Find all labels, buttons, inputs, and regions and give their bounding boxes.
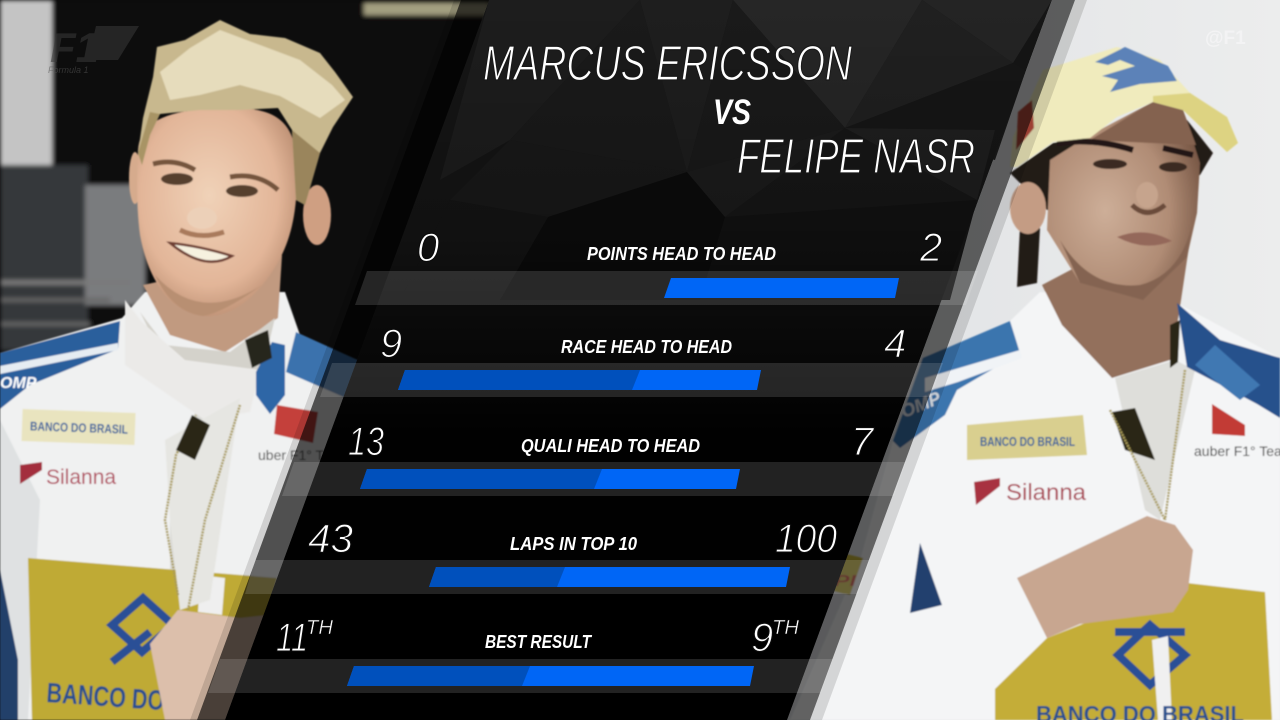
cap brim [1153,93,1238,152]
bar [664,278,899,298]
bar: Ericsson share [347,666,530,686]
lower fade to black [225,0,1052,720]
nose [180,230,224,236]
value: Nasr: 9 [751,616,773,660]
watermark: F1 logo: F1 [50,24,99,71]
value: Ericsson: 0 [417,226,439,270]
left shoulder blue [893,321,1020,448]
value: Ericsson: 13 [348,420,384,464]
forehead shade [1090,102,1196,145]
track [355,271,978,305]
value: Nasr: 2 [919,226,942,270]
face [1047,102,1200,300]
cap side logo [1016,100,1034,150]
eyes [161,173,193,185]
bar: Ericsson share [360,469,602,489]
jaw stubble [1060,225,1192,300]
stat row: laps in top 10 [245,517,870,594]
title: driver names [483,37,975,184]
stat row: best result [208,616,833,693]
sponsor badge [22,409,136,445]
name: Marcus Ericsson: MARCUS ERICSSON [483,37,852,91]
OMP text: OMP [898,387,944,422]
ear [1010,182,1046,234]
value: Ericsson: 11 [276,616,308,660]
sponsor badge: BANCO DO BRASIL [30,419,129,437]
track [245,560,870,594]
value: Ericsson: 43 [308,517,353,561]
driver photo: Felipe Nasr [790,47,1280,720]
label: BEST RESULT [485,632,593,652]
neck [143,255,282,352]
brows [1057,142,1133,150]
track [320,363,943,397]
white placket over panel [198,575,225,615]
bar: Nasr share [360,469,740,489]
hair below ear [1017,227,1040,287]
Sauber logo [1212,404,1245,436]
Banco do Brasil logo [1115,625,1185,685]
right photo backdrop [775,0,1280,720]
track [282,462,906,496]
stat row: points head to head [355,226,978,305]
cap logo [1095,47,1177,92]
left shoulder blue [0,321,120,409]
OMP shoulder text: OMP [0,375,37,392]
race suit [790,292,1280,720]
yellow chest panel [995,583,1272,720]
suit collar [125,300,260,420]
label: QUALI HEAD TO HEAD [521,436,700,456]
driver photo: Marcus Ericsson [0,20,362,720]
panel: central dark slanted panel [225,0,1052,720]
panel: dark translucent slanted band left [197,0,489,720]
mouth [1117,232,1172,246]
dark side strip [0,570,18,720]
bar: Nasr share [429,567,790,587]
nose [1132,205,1165,212]
bar: Ericsson share [429,567,565,587]
Silanna patch [974,478,1086,505]
panel: light outer slanted strip left [190,0,489,720]
sponsor badge [967,415,1087,460]
panel: dark translucent slanted band right [787,0,1075,720]
Pirelli patch: PI [834,573,857,590]
neck [1042,240,1190,378]
stat row: race head to head [320,322,943,397]
watermark: F1 logo: Formula 1 [48,65,89,75]
face [137,108,297,316]
watermark: @F1: @F1 [1205,28,1246,49]
value: Nasr: 4 [884,322,906,366]
hand [1017,516,1193,638]
zip opening [165,398,240,610]
label: LAPS IN TOP 10 [510,534,637,554]
chin stubble [155,275,262,316]
ears [303,185,331,245]
smile [170,243,232,262]
undershirt and neck [140,312,275,395]
race suit [0,292,362,720]
panel: light outer slanted strip right [810,0,1087,720]
value: Nasr: 100 [775,517,837,561]
label: RACE HEAD TO HEAD [561,337,732,357]
eyes [1093,159,1127,169]
vs label: VS [713,93,751,132]
value: Nasr: TH [772,617,800,639]
watermark: F1 logo [48,24,139,75]
value: Ericsson: TH [306,617,334,639]
Pirelli patch [830,553,863,595]
Silanna patch: Silanna [1006,479,1086,505]
hair [138,20,353,205]
value: Nasr [751,616,800,660]
low-poly facets [400,0,1052,300]
yellow chest panel [28,558,277,720]
bar: Nasr share [347,666,754,686]
left photo backdrop [0,0,640,720]
right shoulder blue [286,332,362,405]
Silanna patch [20,462,116,489]
stat row: quali head to head [282,420,906,496]
value: Nasr: 7 [851,420,875,464]
hand [150,610,268,720]
cap [1010,47,1238,167]
Silanna patch: Silanna [46,466,116,489]
name: Felipe Nasr: FELIPE NASR [737,130,975,184]
bar: Ericsson share [398,370,640,390]
hair highlights [160,30,345,118]
bar: Nasr share [398,370,761,390]
hair back [1010,120,1213,210]
arm sleeve slit [910,543,942,613]
undershirt [1115,360,1195,520]
value: Ericsson: 9 [380,322,402,366]
brows [153,162,195,170]
sponsor badge: BANCO DO BRASIL [980,435,1075,449]
Banco do Brasil logo [112,598,173,662]
suit side shadow [0,420,40,720]
label: POINTS HEAD TO HEAD [587,244,776,264]
Sauber logo [274,405,318,443]
chest text: BANCO DO [46,677,165,716]
right collar blue [1177,303,1280,418]
driver photo: Marcus Ericsson: uber F1° T [258,447,324,463]
track [208,659,833,693]
